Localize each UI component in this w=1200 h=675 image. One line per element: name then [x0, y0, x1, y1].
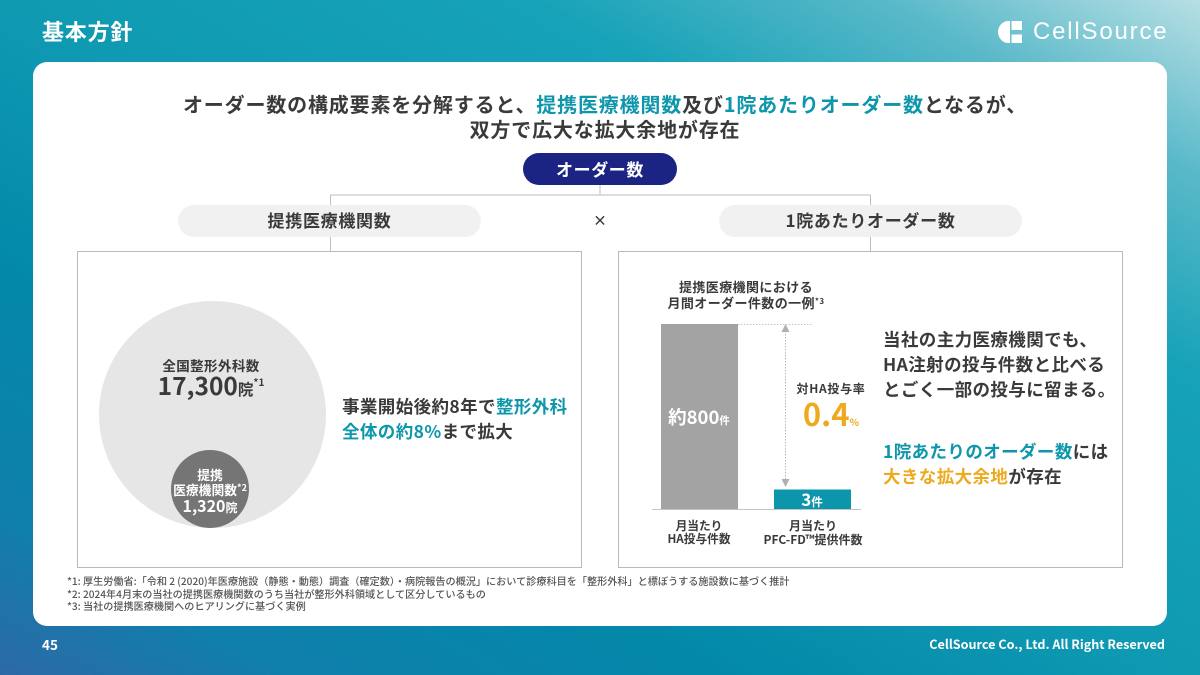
footnotes: *3: 当社の提携医療機関へのヒアリングに基づく実例: [67, 598, 306, 613]
panel: partner institutions: [77, 251, 582, 568]
label: PFC-FD supplied: [764, 517, 862, 548]
chart title: [668, 277, 824, 312]
page number: 45: [42, 634, 58, 654]
footnotes: *1: 厚生労働省:「令和 2 (2020)年医療施設（静態・動態）調査（確定数）・病院報告の概況」において診療科目を「整形外科」と標ぼうする施設数に基づく推計: [67, 573, 789, 588]
label: partner institutions: 提携: [197, 465, 223, 484]
chart title: 月間オーダー件数の一例*3: [668, 292, 824, 312]
footnotes: [67, 573, 790, 613]
text: expansion statement: [342, 394, 568, 444]
text: conclusion: [883, 439, 1109, 489]
pill: partner medical institutions: [178, 205, 481, 237]
pill: orders per clinic: [719, 205, 1022, 237]
value: about 800: 約800件: [668, 404, 730, 430]
value: 1,320: 1,320院: [183, 493, 237, 517]
label: HA doses: HA投与件数: [667, 530, 731, 547]
label: PFC-FD supplied: PFC-FD™提供件数: [764, 530, 862, 548]
label: HA doses: [667, 517, 731, 547]
heading: 双方で広大な拡大余地が存在: [470, 114, 740, 143]
label: ratio to HA: 対HA投与率: [797, 380, 865, 397]
text: expansion statement: 全体の約8%まで拡大: [342, 419, 513, 444]
value: 3: 3件: [801, 486, 823, 511]
label: partner institutions: 医療機関数*2: [173, 480, 247, 499]
chart title: 提携医療機関における: [679, 277, 813, 296]
multiplication sign: ×: [593, 211, 607, 231]
label: HA doses: 月当たり: [676, 517, 722, 534]
panel: orders per clinic: [618, 251, 1123, 568]
value: 17,300: 17,300院*1: [158, 368, 264, 403]
large circle: all orthopedic clinics: [99, 301, 326, 528]
text: explanation: とごく一部の投与に留まる。: [883, 377, 1116, 402]
small circle: partner institutions: [171, 450, 249, 528]
pill: order count: オーダー数: [556, 156, 644, 181]
label: all orthopedic clinics: 全国整形外科数: [162, 355, 260, 375]
pill: order count: [523, 153, 677, 185]
label: PFC-FD supplied: 月当たり: [789, 517, 837, 534]
text: explanation: 当社の主力医療機関でも、: [883, 327, 1097, 352]
text: explanation: [883, 327, 1116, 402]
footnotes: *2: 2024年4月末の当社の提携医療機関数のうち当社が整形外科領域として区分しているもの: [67, 586, 486, 600]
copyright: CellSource Co., Ltd. All Right Reserved: [929, 634, 1165, 653]
text: expansion statement: 事業開始後約8年で整形外科: [342, 394, 568, 419]
main white panel: [33, 62, 1167, 626]
heading: オーダー数の構成要素を分解すると、提携医療機関数及び1院あたりオーダー数となるが、: [183, 89, 1027, 118]
heading: [183, 89, 1027, 143]
bar chart: [652, 324, 861, 510]
text: explanation: HA注射の投与件数と比べる: [883, 352, 1105, 377]
text: conclusion: 大きな拡大余地が存在: [883, 464, 1062, 489]
logo: CellSource: CellSource: [1033, 18, 1168, 45]
page title: 基本方針: [42, 15, 133, 47]
text: conclusion: 1院あたりのオーダー数には: [883, 439, 1109, 464]
pill: orders per clinic: 1院あたりオーダー数: [785, 207, 956, 232]
value: 0.4%: 0.4%: [803, 390, 859, 435]
label: partner institutions: [173, 465, 247, 499]
pill: partner medical institutions: 提携医療機関数: [268, 207, 391, 232]
